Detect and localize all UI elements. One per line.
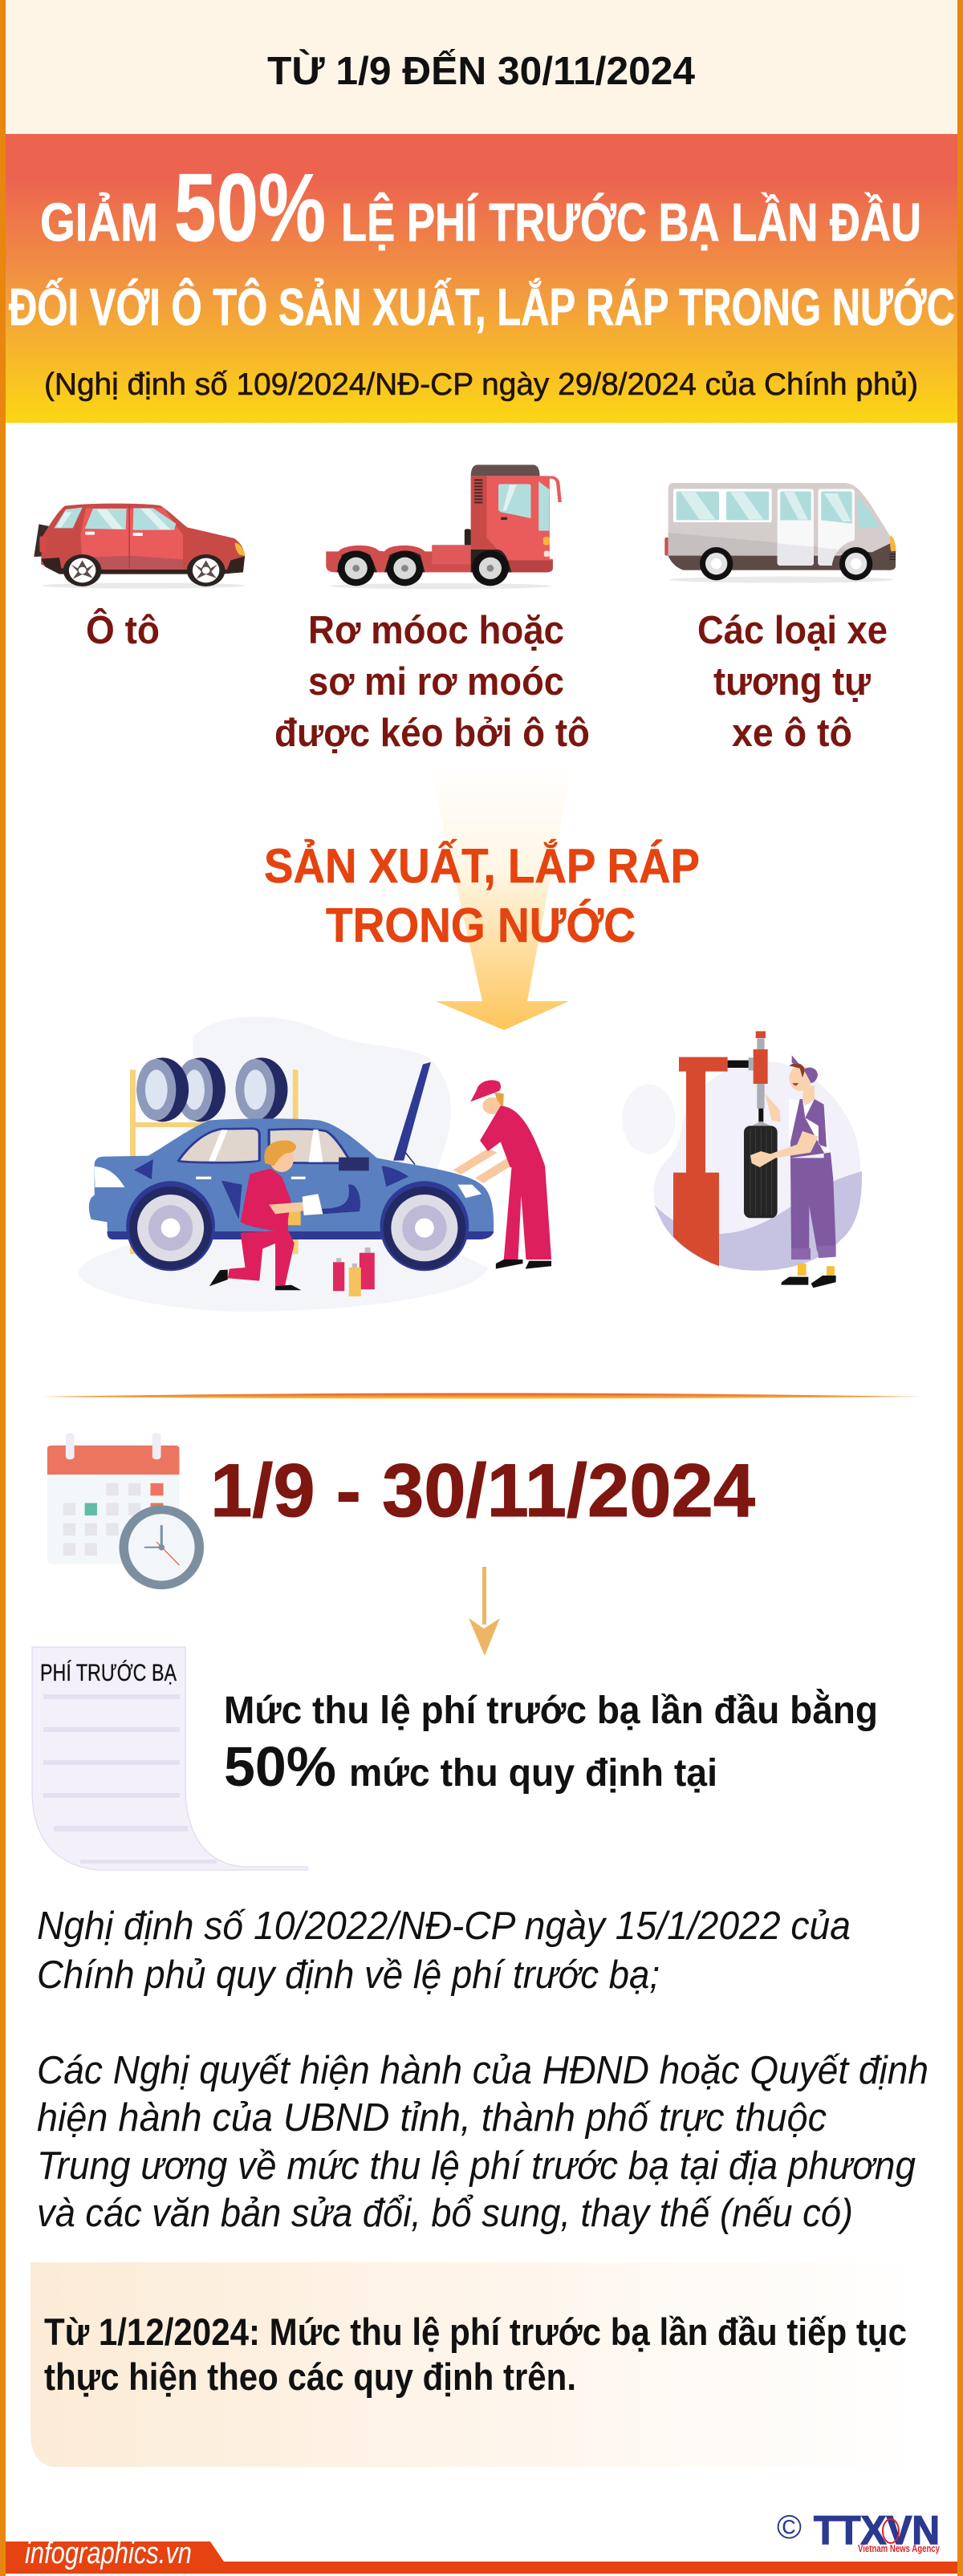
worker kneeling bbox=[209, 1140, 323, 1290]
vehicle label: rơ moóc: Rơ móoc hoặc bbox=[308, 609, 564, 652]
arrow: big gradient down arrow bbox=[430, 769, 571, 1030]
title banner: GIẢM bbox=[40, 193, 158, 253]
icon: fee document bbox=[32, 1647, 307, 1870]
heading: sản xuất lắp ráp trong nước: TRONG NƯỚC bbox=[326, 899, 636, 952]
panel: note from 1/12/2024 bbox=[30, 2262, 925, 2467]
date heading: 1/9 - 30/11/2024 bbox=[210, 1448, 755, 1532]
title banner: 50% bbox=[174, 154, 326, 262]
divider bbox=[42, 1393, 921, 1399]
footer bar: infographics.vn bbox=[25, 2537, 192, 2570]
illustration: car repair scene bbox=[79, 1016, 551, 1312]
footer bar bbox=[6, 2537, 957, 2574]
icon: red car bbox=[34, 504, 246, 589]
worker bending over hood bbox=[453, 1080, 551, 1269]
illustration: tyre machine scene bbox=[622, 1031, 862, 1288]
icon: passenger van bbox=[664, 483, 896, 583]
vehicle label: các loại xe bbox=[697, 609, 888, 755]
heading: sản xuất lắp ráp trong nước bbox=[264, 839, 700, 952]
top date strip: TỪ 1/9 ĐẾN 30/11/2024 bbox=[267, 49, 695, 93]
statement: fee rate: 50% bbox=[224, 1735, 336, 1798]
logo: TTXVN: TTXVN bbox=[814, 2508, 940, 2553]
vehicle label: Ô tô: Ô tô bbox=[86, 608, 160, 652]
vehicle label: rơ moóc: sơ mi rơ moóc bbox=[308, 660, 564, 704]
text block: legal references: Nghị định số 10/2022/NĐ-CP ngày 15/1/2022 của bbox=[37, 1905, 851, 1948]
statement: fee rate bbox=[224, 1688, 878, 1798]
icon: fee document: PHÍ TRƯỚC BẠ bbox=[40, 1660, 177, 1686]
text block: legal references: Trung ương về mức thu lệ phí trước bạ tại địa phương bbox=[37, 2144, 916, 2188]
arrow: thin down arrow bbox=[469, 1567, 500, 1656]
title banner bbox=[0, 134, 963, 423]
text block: legal references: hiện hành của UBND tỉnh, thành phố trực thuộc bbox=[37, 2096, 827, 2140]
panel: note from 1/12/2024: thực hiện theo các quy định trên. bbox=[44, 2355, 576, 2398]
icon: tractor truck bbox=[326, 464, 560, 589]
logo: TTXVN: © bbox=[777, 2508, 802, 2546]
vehicle label: các loại xe: Các loại xe bbox=[697, 609, 888, 652]
text block: legal references: và các văn bản sửa đổi, bổ sung, thay thế (nếu có) bbox=[37, 2192, 853, 2235]
statement: fee rate: Mức thu lệ phí trước bạ lần đầu bằng bbox=[224, 1688, 878, 1732]
text block: legal references: Các Nghị quyết hiện hành của HĐND hoặc Quyết định bbox=[37, 2049, 928, 2092]
title banner: (Nghị định số 109/2024/NĐ-CP ngày 29/8/2024 của Chính phủ) bbox=[44, 367, 918, 402]
text block: legal references bbox=[37, 1905, 928, 2235]
vehicle label: rơ moóc: được kéo bởi ô tô bbox=[274, 712, 590, 755]
icon: calendar and clock bbox=[47, 1433, 204, 1589]
heading: sản xuất lắp ráp trong nước: SẢN XUẤT, LẮP RÁP bbox=[264, 839, 700, 893]
vehicle label: các loại xe: tương tự bbox=[713, 660, 871, 704]
text block: legal references: Chính phủ quy định về lệ phí trước bạ; bbox=[37, 1953, 660, 1997]
vehicle label: rơ moóc bbox=[274, 609, 590, 755]
statement: fee rate: mức thu quy định tại bbox=[349, 1752, 717, 1795]
top date strip bbox=[0, 0, 963, 134]
vehicle label: các loại xe: xe ô tô bbox=[732, 712, 852, 755]
